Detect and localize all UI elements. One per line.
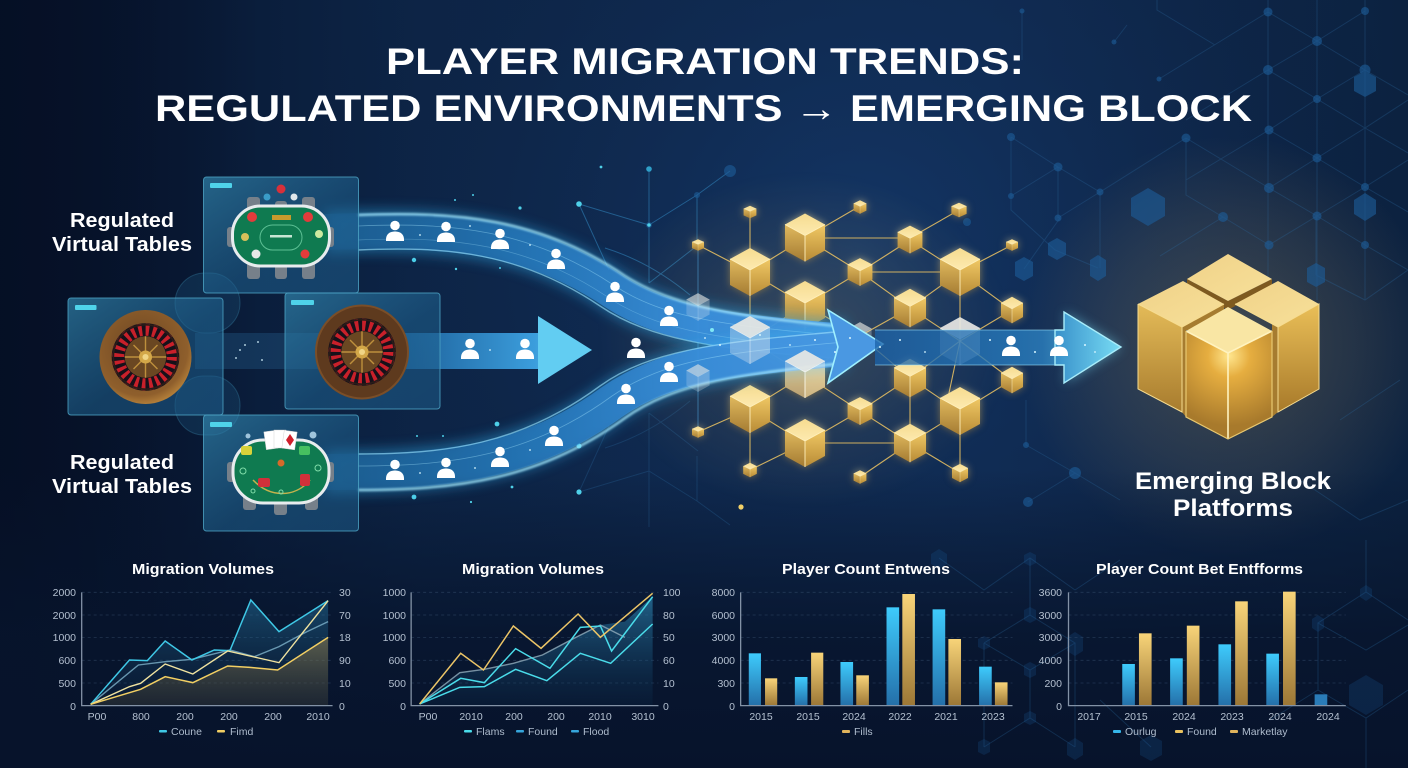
- axis labels: 0: [1056, 701, 1062, 713]
- background nodes and hexes: [646, 7, 1383, 761]
- axis labels: 2010: [306, 711, 330, 723]
- legend: [842, 726, 873, 738]
- flow particles: [412, 166, 744, 510]
- icon: roulette wheel left: [100, 310, 192, 404]
- back block top: [1187, 254, 1272, 301]
- axis labels: 2024: [1316, 711, 1340, 723]
- axis labels: 10: [339, 678, 351, 690]
- axis labels: 2000: [53, 610, 76, 622]
- legend: Fills: [854, 726, 873, 738]
- panel: poker table top: [204, 177, 358, 293]
- chart title: Migration Volumes: [132, 561, 274, 578]
- axis labels: 500: [388, 678, 406, 690]
- right block: [1235, 281, 1319, 417]
- axis labels: P00: [419, 711, 437, 723]
- axis labels: 2023: [981, 711, 1005, 723]
- axis labels: P00: [88, 711, 106, 723]
- label: regulated tables top: Regulated: [70, 210, 174, 232]
- axis labels: 0: [729, 701, 735, 713]
- legend: Flams: [476, 726, 505, 738]
- axis labels: 2015: [796, 711, 820, 723]
- axis labels: 4000: [712, 655, 735, 667]
- chart: player count bars right: [1039, 561, 1346, 738]
- blockchain network cubes: [595, 170, 1023, 510]
- axis labels: 10: [663, 678, 675, 690]
- legend: [159, 726, 253, 738]
- axis labels: 1000: [53, 632, 76, 644]
- axis labels: 3600: [1039, 587, 1062, 599]
- plot lines: [411, 592, 658, 706]
- axis labels: 200: [264, 711, 282, 723]
- axis labels: 30: [339, 587, 351, 599]
- axis labels: [1039, 587, 1340, 723]
- stream: bottom migration flow: [325, 332, 845, 490]
- axis labels: 70: [339, 610, 351, 622]
- panel: roulette left: [68, 298, 223, 415]
- axis labels: 0: [663, 701, 669, 713]
- panel: blackjack table bottom: [204, 415, 358, 531]
- legend: [464, 726, 609, 738]
- axis labels: 0: [339, 701, 345, 713]
- axis labels: 2024: [1268, 711, 1292, 723]
- axis labels: 1000: [383, 587, 406, 599]
- axis labels: 200: [220, 711, 238, 723]
- legend: Found: [528, 726, 558, 738]
- migrating player icons: [386, 221, 1068, 480]
- axis labels: 2021: [934, 711, 958, 723]
- axis labels: 2010: [588, 711, 612, 723]
- gold blockchain link lines: [698, 206, 1012, 477]
- left block: [1138, 281, 1224, 417]
- legend: Coune: [171, 726, 202, 738]
- axis labels: [383, 587, 681, 723]
- arrow: output to emerging block: [875, 312, 1121, 383]
- axis labels: [53, 587, 351, 723]
- axis labels: 2015: [1124, 711, 1148, 723]
- axis labels: 8000: [712, 587, 735, 599]
- background hex network: [579, 0, 1408, 768]
- axis labels: 500: [58, 678, 76, 690]
- axis labels: 200: [176, 711, 194, 723]
- axis labels: 2000: [53, 587, 76, 599]
- axis labels: 3000: [1039, 632, 1062, 644]
- front block: [1186, 307, 1272, 439]
- plot lines: [82, 592, 333, 706]
- washed-out cubes over the streams: [686, 293, 980, 398]
- axis labels: 4000: [1039, 655, 1062, 667]
- axis labels: 2024: [842, 711, 866, 723]
- title: PLAYER MIGRATION TRENDS:: [386, 41, 1024, 82]
- label: regulated tables bottom: Regulated: [70, 452, 174, 474]
- axis labels: 800: [132, 711, 150, 723]
- axis labels: 2024: [1172, 711, 1196, 723]
- icon: golden block cluster: [1138, 254, 1319, 439]
- axis labels: 50: [663, 632, 675, 644]
- merged arrowhead: [828, 310, 883, 383]
- axis labels: 100: [663, 587, 681, 599]
- axis labels: 2023: [1220, 711, 1244, 723]
- upper flow connector lines: [579, 169, 730, 295]
- axis labels: 3000: [1039, 610, 1062, 622]
- label: emerging block platforms: Emerging Block: [1135, 468, 1332, 495]
- gold cube set: [692, 200, 1023, 484]
- axis labels: 6000: [712, 610, 735, 622]
- axis labels: 1000: [383, 632, 406, 644]
- legend: Ourlug: [1125, 726, 1157, 738]
- axis labels: 200: [1044, 678, 1062, 690]
- legend: Marketlay: [1242, 726, 1288, 738]
- axis labels: 600: [388, 655, 406, 667]
- chart title: Migration Volumes: [462, 561, 604, 578]
- axis labels: 0: [70, 701, 76, 713]
- label: emerging block platforms: Platforms: [1173, 495, 1293, 522]
- axis labels: 0: [400, 701, 406, 713]
- axis labels: 200: [505, 711, 523, 723]
- axis labels: 2015: [749, 711, 773, 723]
- label: regulated tables top: Virtual Tables: [52, 234, 192, 256]
- axis labels: 90: [339, 655, 351, 667]
- connector capsules behind panels: [175, 273, 240, 435]
- axis labels: 1000: [383, 610, 406, 622]
- axis labels: 3000: [712, 632, 735, 644]
- back dark seam: [1187, 279, 1272, 310]
- legend: Fimd: [230, 726, 253, 738]
- title: REGULATED ENVIRONMENTS → EMERGING BLOCK: [155, 88, 1252, 129]
- axis labels: 3010: [631, 711, 655, 723]
- axis labels: 60: [663, 655, 675, 667]
- legend: Flood: [583, 726, 609, 738]
- stream particles: [235, 225, 1096, 474]
- panel: roulette right: [285, 293, 440, 409]
- icon: roulette wheel right: [316, 306, 408, 398]
- cube halo: [595, 170, 1015, 510]
- chart title: Player Count Bet Entfforms: [1096, 561, 1303, 578]
- bars: [1069, 592, 1346, 706]
- axis labels: [712, 587, 1005, 723]
- axis labels: 200: [547, 711, 565, 723]
- axis labels: 600: [58, 655, 76, 667]
- chart: migration volumes right: [383, 561, 681, 738]
- bars: [741, 592, 1013, 706]
- chart: player count bars left: [712, 561, 1013, 738]
- chart title: Player Count Entwens: [782, 561, 950, 578]
- legend: [1113, 726, 1288, 738]
- arrow: middle flow: [195, 316, 592, 384]
- axis labels: 2022: [888, 711, 912, 723]
- axis labels: 80: [663, 610, 675, 622]
- chart: migration volumes left: [53, 561, 351, 738]
- axis labels: 2010: [459, 711, 483, 723]
- axis labels: 18: [339, 632, 351, 644]
- axis labels: 2017: [1077, 711, 1101, 723]
- label: regulated tables bottom: Virtual Tables: [52, 476, 192, 498]
- axis labels: 300: [717, 678, 735, 690]
- legend: Found: [1187, 726, 1217, 738]
- stream: top migration flow: [325, 214, 845, 358]
